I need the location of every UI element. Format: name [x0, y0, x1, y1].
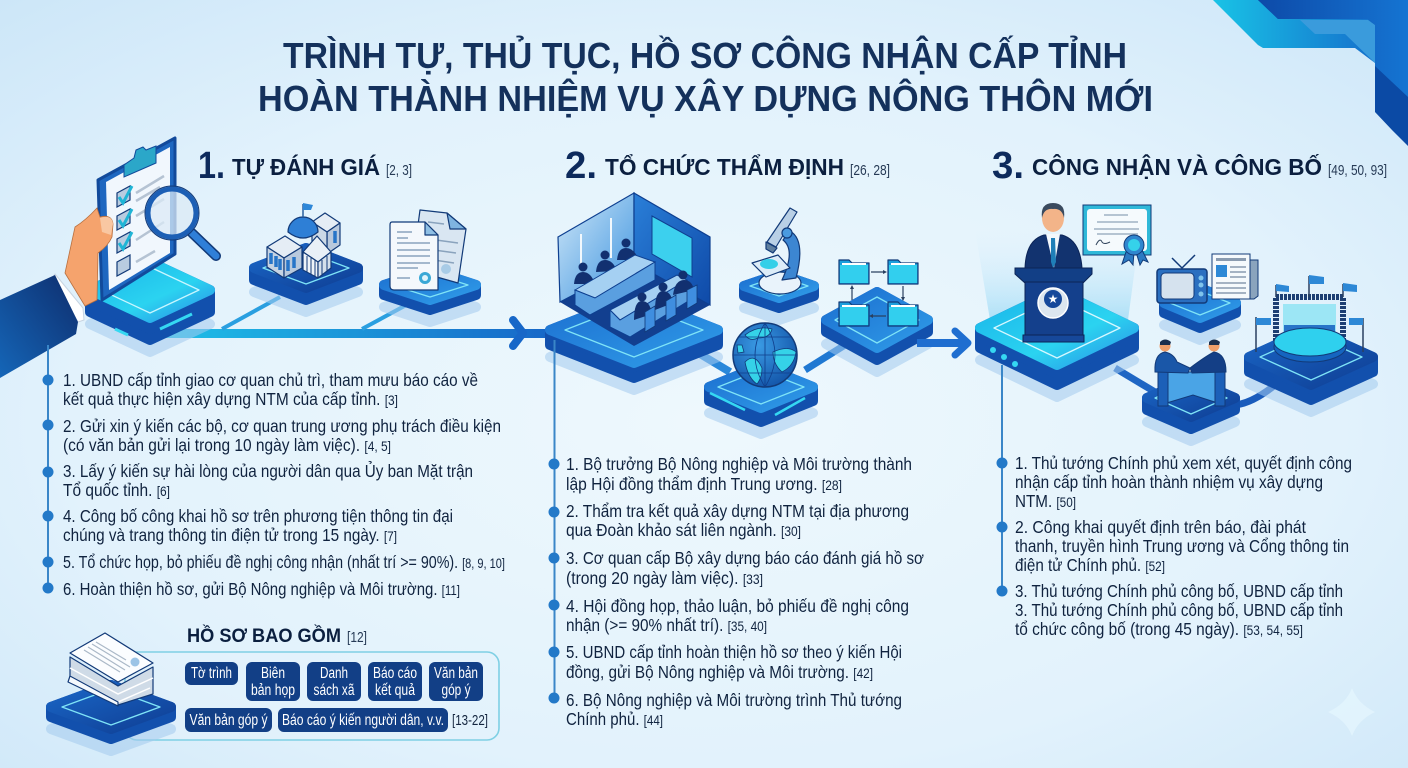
chips: Biên: [261, 665, 285, 682]
dossier box: [125, 652, 499, 740]
icon: speaker at podium: [1015, 203, 1092, 342]
heading: step 2: [565, 145, 890, 187]
icon: television: [1157, 255, 1207, 303]
icon: government building: [267, 203, 340, 278]
text block: step 2 list: nhận (>= 90% nhất trí). [35, 40]: [566, 615, 767, 635]
platform: dossier base: [51, 685, 171, 751]
icon: certificate: [1083, 205, 1151, 265]
text block: step 1 list: Tổ quốc tỉnh. [6]: [63, 480, 170, 500]
icon: clipboard with checklist: [98, 138, 175, 300]
text block: step 3 list: 3. Thủ tướng Chính phủ công bố, UBND cấp tỉnh: [1015, 600, 1343, 620]
text block: step 2 list: 1. Bộ trưởng Bộ Nông nghiệp và Môi trường thành: [566, 454, 912, 474]
timeline: step 2: [548, 340, 560, 704]
chips: góp ý: [442, 682, 471, 699]
icon: stage with flags: [1256, 275, 1363, 362]
title: HOÀN THÀNH NHIỆM VỤ XÂY DỰNG NÔNG THÔN MỚI: [258, 77, 1153, 119]
heading: step 3: [992, 145, 1387, 187]
text block: step 3 list: 1. Thủ tướng Chính phủ xem xét, quyết định công: [1015, 453, 1352, 473]
title: TRÌNH TỰ, THỦ TỤC, HỒ SƠ CÔNG NHẬN CẤP TỈNH: [283, 34, 1127, 76]
chips: Văn bản: [434, 665, 478, 682]
chips: [13-22]: [452, 713, 488, 729]
platform: clipboard base: [90, 262, 210, 352]
dossier heading: HỒ SƠ BAO GỒM: [187, 623, 341, 647]
heading: step 3: [49, 50, 93]: [1328, 162, 1387, 179]
timeline: step 1: [42, 345, 54, 594]
text block: step 2 list: 6. Bộ Nông nghiệp và Môi trường trình Thủ tướng: [566, 690, 902, 710]
chips: Văn bản góp ý: [190, 712, 268, 729]
text block: step 2 list: 2. Thẩm tra kết quả xây dựng NTM tại địa phương: [566, 501, 909, 521]
text block: step 1 list: 5. Tổ chức họp, bỏ phiếu đề nghị công nhận (nhất trí >= 90%). [8, 9, 10]: [63, 552, 505, 572]
platform: documents base: [384, 270, 476, 322]
chips: kết quả: [375, 682, 415, 699]
text block: step 1 list: chúng và trang thông tin điện tử trong 15 ngày. [7]: [63, 525, 397, 545]
chips: sách xã: [314, 682, 355, 699]
panel: step 3: [975, 145, 1387, 639]
icon: sparkle watermark: [1328, 688, 1375, 736]
text block: step 3 list: thanh, truyền hình Trung ương và Cổng thông tin: [1015, 536, 1349, 556]
text block: step 3 list: [1015, 453, 1352, 639]
heading: step 1: [198, 145, 412, 187]
connectors: step 2: [685, 345, 845, 372]
text block: step 1 list: 2. Gửi xin ý kiến các bộ, cơ quan trung ương phụ trách điều kiện: [63, 416, 501, 436]
icon: globe: [733, 323, 797, 387]
panel: dossier contents: [51, 623, 499, 751]
icon: documents: [390, 210, 466, 290]
platform: podium base: [980, 291, 1134, 397]
text block: step 3 list: điện tử Chính phủ. [52]: [1015, 555, 1165, 575]
icon: hand and sleeve: [0, 208, 113, 378]
heading: step 2: TỔ CHỨC THẨM ĐỊNH: [605, 153, 844, 180]
text block: step 2 list: 4. Hội đồng họp, thảo luận, bỏ phiếu đề nghị công: [566, 596, 909, 616]
icon: meeting room: [558, 193, 710, 346]
text block: step 2 list: lập Hội đồng thẩm định Trung ương. [28]: [566, 474, 842, 494]
text block: step 1 list: [63, 370, 505, 599]
platform: globe base: [709, 366, 813, 434]
heading: step 3: 3.: [992, 145, 1024, 187]
timeline: step 3: [996, 365, 1008, 596]
panel: step 2: [548, 145, 968, 729]
dossier heading: [12]: [347, 629, 367, 646]
icon: folder flow: [839, 260, 918, 326]
chips: Báo cáo ý kiến người dân, v.v.: [282, 712, 444, 729]
chips: Danh: [320, 665, 348, 682]
panel: step 1: [0, 138, 505, 751]
icon: magnifier: [145, 186, 216, 256]
arrow: step 2 to step 3: [917, 331, 968, 355]
text block: step 3 list: tổ chức công bố (trong 45 ngày). [53, 54, 55]: [1015, 619, 1303, 639]
platform: folders base: [826, 292, 928, 372]
platform: meeting room base: [550, 297, 718, 390]
connectors: step 3: [1115, 368, 1275, 405]
chips: Báo cáo: [373, 665, 417, 682]
main arrow: step 1 to step 2: [160, 297, 550, 346]
icon: microscope: [752, 208, 801, 294]
platform: media base: [1164, 288, 1236, 340]
platform: building base: [254, 248, 358, 312]
text block: step 2 list: (trong 20 ngày làm việc). [33]: [566, 568, 763, 588]
heading: step 3: CÔNG NHẬN VÀ CÔNG BỐ: [1032, 153, 1322, 180]
text block: step 2 list: qua Đoàn khảo sát liên ngành. [30]: [566, 520, 801, 540]
text block: step 1 list: kết quả thực hiện xây dựng NTM của cấp tỉnh. [3]: [63, 389, 398, 409]
title: [258, 34, 1153, 119]
text block: step 2 list: 3. Cơ quan cấp Bộ xây dựng báo cáo đánh giá hồ sơ: [566, 548, 924, 568]
heading: step 1: 1.: [198, 145, 225, 187]
platform: handshake base: [1147, 379, 1235, 441]
text block: step 3 list: 3. Thủ tướng Chính phủ công bố, UBND cấp tỉnh: [1015, 581, 1343, 601]
text block: step 3 list: nhận cấp tỉnh hoàn thành nhiệm vụ xây dựng: [1015, 472, 1323, 492]
chips: [185, 662, 488, 732]
text block: step 3 list: NTM. [50]: [1015, 491, 1076, 511]
text block: step 3 list: 2. Công khai quyết định trên báo, đài phát: [1015, 517, 1306, 537]
chips: bản họp: [251, 682, 295, 699]
heading: step 2: [26, 28]: [850, 162, 890, 179]
text block: step 2 list: 5. UBND cấp tỉnh hoàn thiện hồ sơ theo ý kiến Hội: [566, 642, 902, 662]
text block: step 2 list: đồng, gửi Bộ Nông nghiệp và Môi trường. [42]: [566, 662, 873, 682]
text block: step 2 list: [566, 454, 924, 729]
text block: step 2 list: Chính phủ. [44]: [566, 709, 663, 729]
platform: microscope base: [744, 274, 814, 320]
light beam: [975, 230, 1140, 320]
text block: step 1 list: 3. Lấy ý kiến sự hài lòng của người dân qua Ủy ban Mặt trận: [63, 460, 473, 481]
heading: step 1: [2, 3]: [386, 162, 412, 179]
text block: step 1 list: (có văn bản gửi lại trong 10 ngày làm việc). [4, 5]: [63, 435, 391, 455]
corner decoration: [1213, 0, 1408, 146]
platform: stage base: [1249, 329, 1373, 412]
text block: step 1 list: 1. UBND cấp tỉnh giao cơ quan chủ trì, tham mưu báo cáo về: [63, 370, 478, 390]
icon: newspaper: [1212, 254, 1258, 299]
heading: step 2: 2.: [565, 145, 597, 187]
heading: step 1: TỰ ĐÁNH GIÁ: [232, 153, 380, 180]
chips: Tờ trình: [191, 665, 232, 682]
text block: step 1 list: 4. Công bố công khai hồ sơ trên phương tiện thông tin đại: [63, 506, 453, 526]
icon: speaker at podium: ★: [1048, 292, 1058, 306]
text block: step 1 list: 6. Hoàn thiện hồ sơ, gửi Bộ Nông nghiệp và Môi trường. [11]: [63, 579, 460, 599]
icon: paper stack: [68, 633, 153, 706]
icon: handshake: [1155, 340, 1226, 406]
